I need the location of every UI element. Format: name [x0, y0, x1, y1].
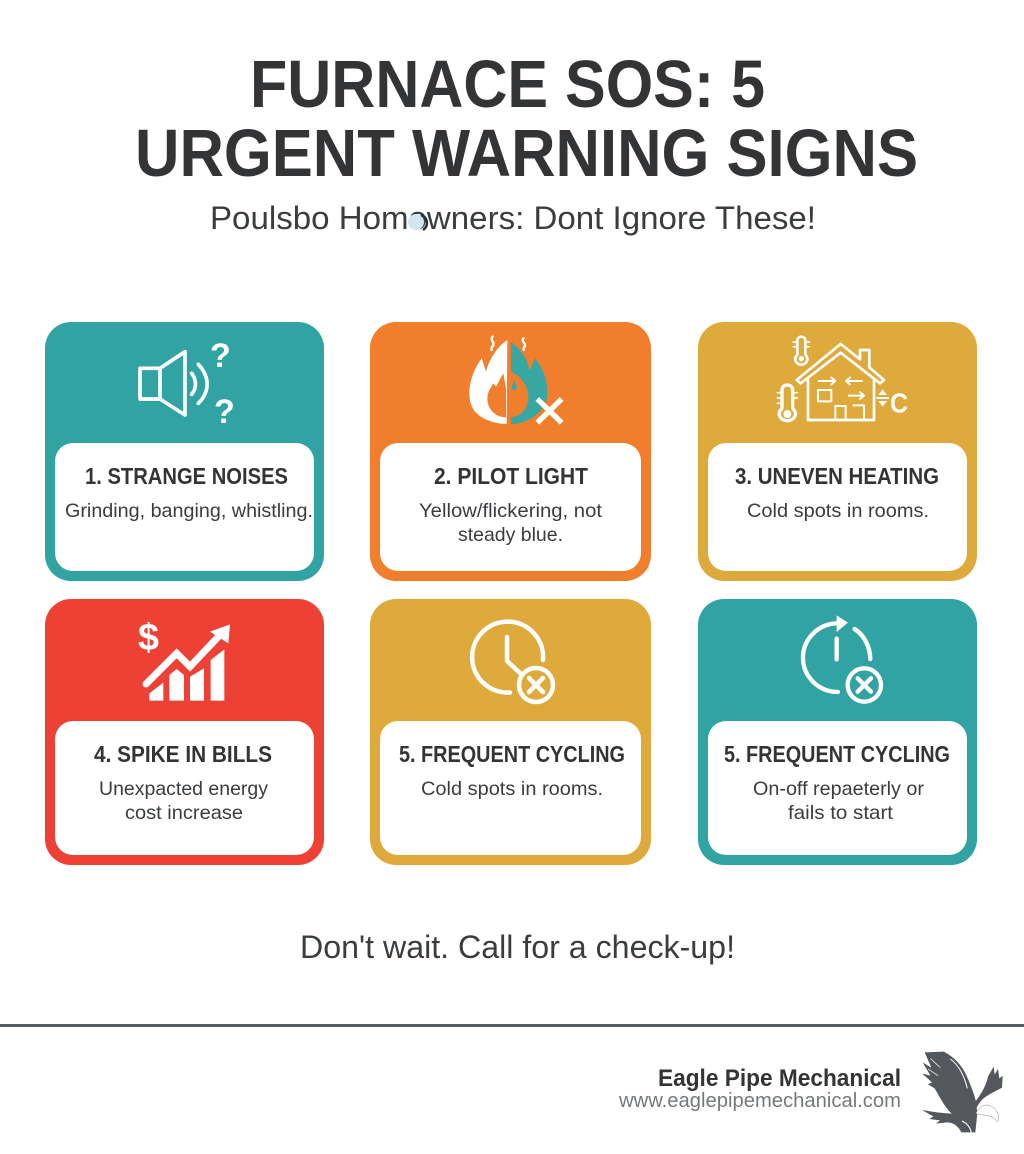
icon: eagle logo: [922, 1052, 1003, 1132]
panel: strange noises: [45, 322, 324, 581]
panel: frequent cycling, power: [698, 599, 977, 865]
heading: pilot light: 2. PILOT LIGHT: [434, 463, 588, 489]
icon: power cycle with cross: [803, 615, 881, 702]
description: pilot light: Yellow/flickering, not: [419, 500, 603, 522]
description: spike in bills: cost increase: [125, 802, 243, 824]
icon: clock with cross: [472, 622, 553, 702]
panel: pilot light: [370, 322, 651, 581]
icon: speaker with question marks: ?: [210, 337, 231, 375]
heading: spike in bills: 4. SPIKE IN BILLS: [94, 741, 272, 767]
description: pilot light: [419, 500, 603, 546]
title: FURNACE SOS: 5: [250, 47, 765, 122]
icon: house with thermometers: C: [890, 388, 908, 419]
heading: strange noises: 1. STRANGE NOISES: [85, 463, 288, 489]
description: frequent cycling, clock: Cold spots in rooms.: [421, 778, 603, 800]
title: [135, 47, 918, 191]
heading: uneven heating: 3. UNEVEN HEATING: [735, 463, 939, 489]
description: frequent cycling, power: [753, 778, 924, 824]
heading: frequent cycling, clock: 5. FREQUENT CYCLING: [399, 741, 625, 767]
heading: frequent cycling, power: 5. FREQUENT CYCLING: [724, 741, 950, 767]
panel: spike in bills: [45, 599, 324, 865]
icon: split flame with cross: [469, 337, 562, 424]
description: frequent cycling, power: On-off repaeterly or: [753, 778, 924, 800]
icon: speaker with question marks: ?: [214, 393, 235, 431]
icon: speaker with question marks: [140, 337, 235, 431]
description: pilot light: steady blue.: [458, 524, 563, 546]
description: strange noises: Grinding, banging, whistling.: [65, 500, 313, 522]
description: spike in bills: Unexpacted energy: [99, 778, 268, 800]
description: spike in bills: [99, 778, 268, 824]
panel: uneven heating: [698, 322, 977, 581]
panel: frequent cycling, clock: [370, 599, 651, 865]
icon: rising bills chart: [138, 617, 230, 701]
company website: www.eaglepipemechanical.com: [618, 1090, 901, 1112]
subtitle: Poulsbo Homowners: Dont Ignore These!: [210, 200, 816, 236]
description: frequent cycling, power: fails to start: [788, 802, 894, 824]
icon: house with thermometers: [777, 337, 908, 421]
icon: rising bills chart: $: [138, 617, 159, 659]
company name: Eagle Pipe Mechanical: [658, 1065, 901, 1092]
description: uneven heating: Cold spots in rooms.: [747, 500, 929, 522]
title: URGENT WARNING SIGNS: [135, 116, 918, 191]
call to action: Don't wait. Call for a check-up!: [300, 929, 735, 965]
